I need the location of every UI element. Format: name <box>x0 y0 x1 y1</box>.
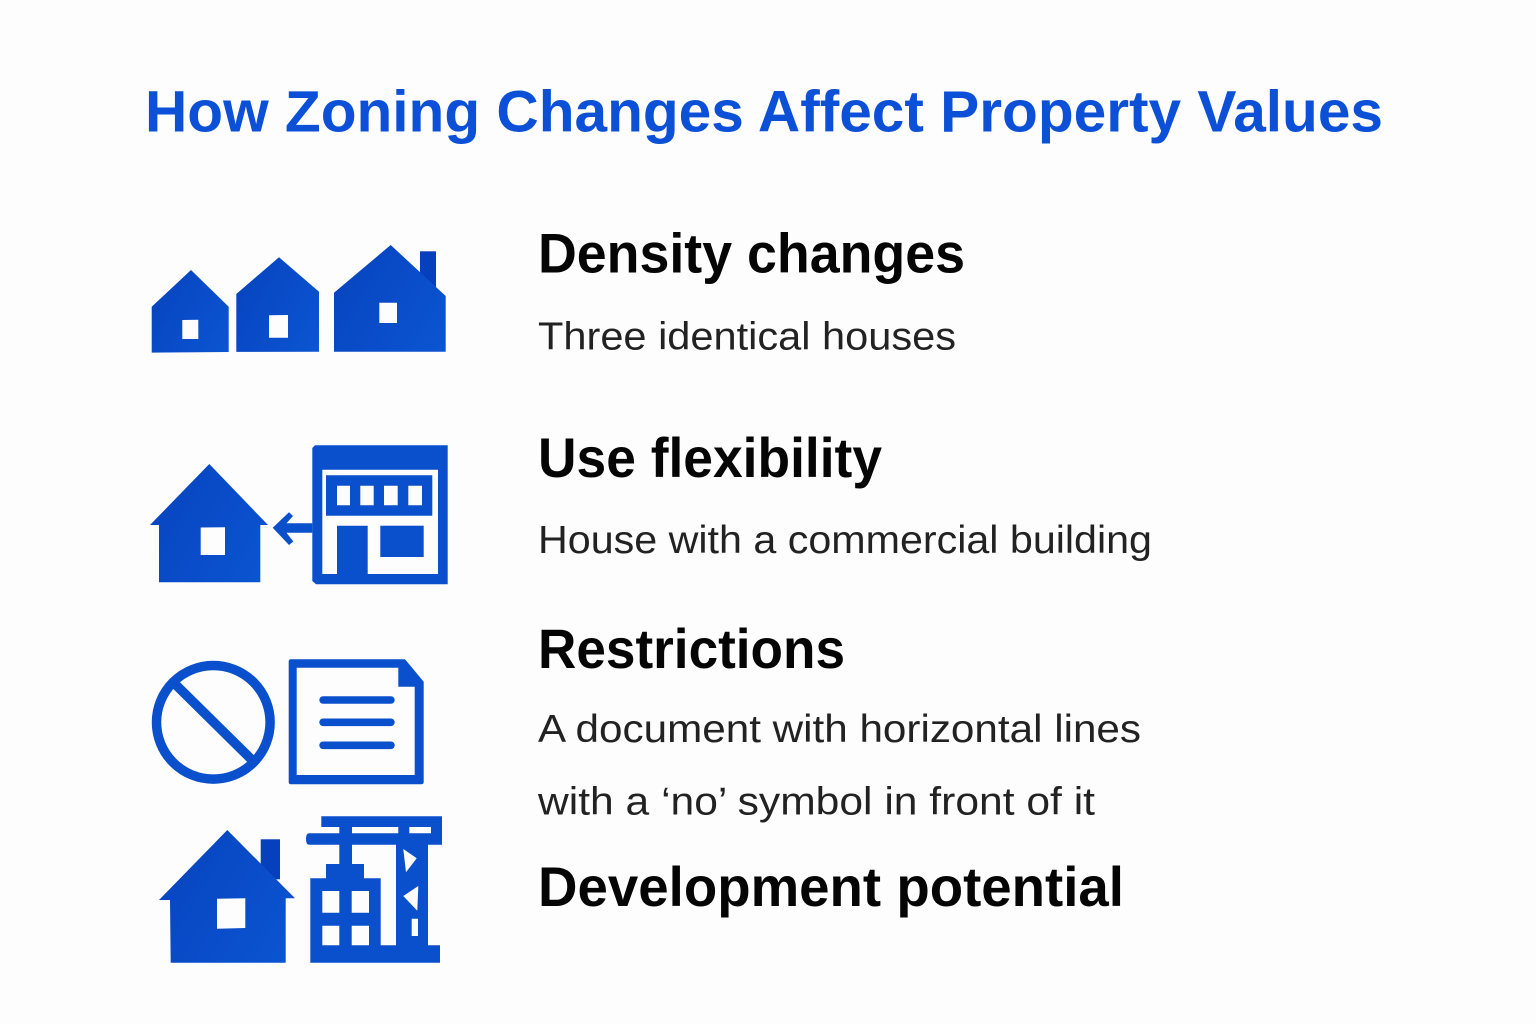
icon: house <box>150 464 268 582</box>
icon: small house one <box>152 270 229 353</box>
heading: development potential: Development potential <box>538 855 1124 918</box>
icon: small house two <box>236 257 319 352</box>
heading: restrictions: Restrictions <box>538 617 845 680</box>
icon: document with lines <box>289 659 424 784</box>
text: restrictions description line two: with a ‘no’ symbol in front of it <box>537 780 1095 823</box>
icon: house with chimney <box>159 830 295 963</box>
row: development potential icon <box>159 816 442 963</box>
text: density description: Three identical houses <box>538 315 956 358</box>
icon: no symbol <box>156 666 270 779</box>
row: use flexibility icon <box>150 445 448 584</box>
title: How Zoning Changes Affect Property Values <box>145 80 1383 145</box>
text: restrictions description line one: A document with horizontal lines <box>538 708 1141 751</box>
heading: use flexibility: Use flexibility <box>538 426 882 489</box>
arrow: commercial to house <box>273 512 312 545</box>
icon: commercial building <box>312 445 448 584</box>
icon: building under construction with crane <box>306 816 442 963</box>
row: density changes icon <box>152 245 446 353</box>
heading: density changes: Density changes <box>538 222 965 285</box>
icon: large house with chimney <box>334 245 446 352</box>
text: use flexibility description: House with a commercial building <box>538 519 1152 562</box>
row: restrictions icon <box>156 659 424 784</box>
